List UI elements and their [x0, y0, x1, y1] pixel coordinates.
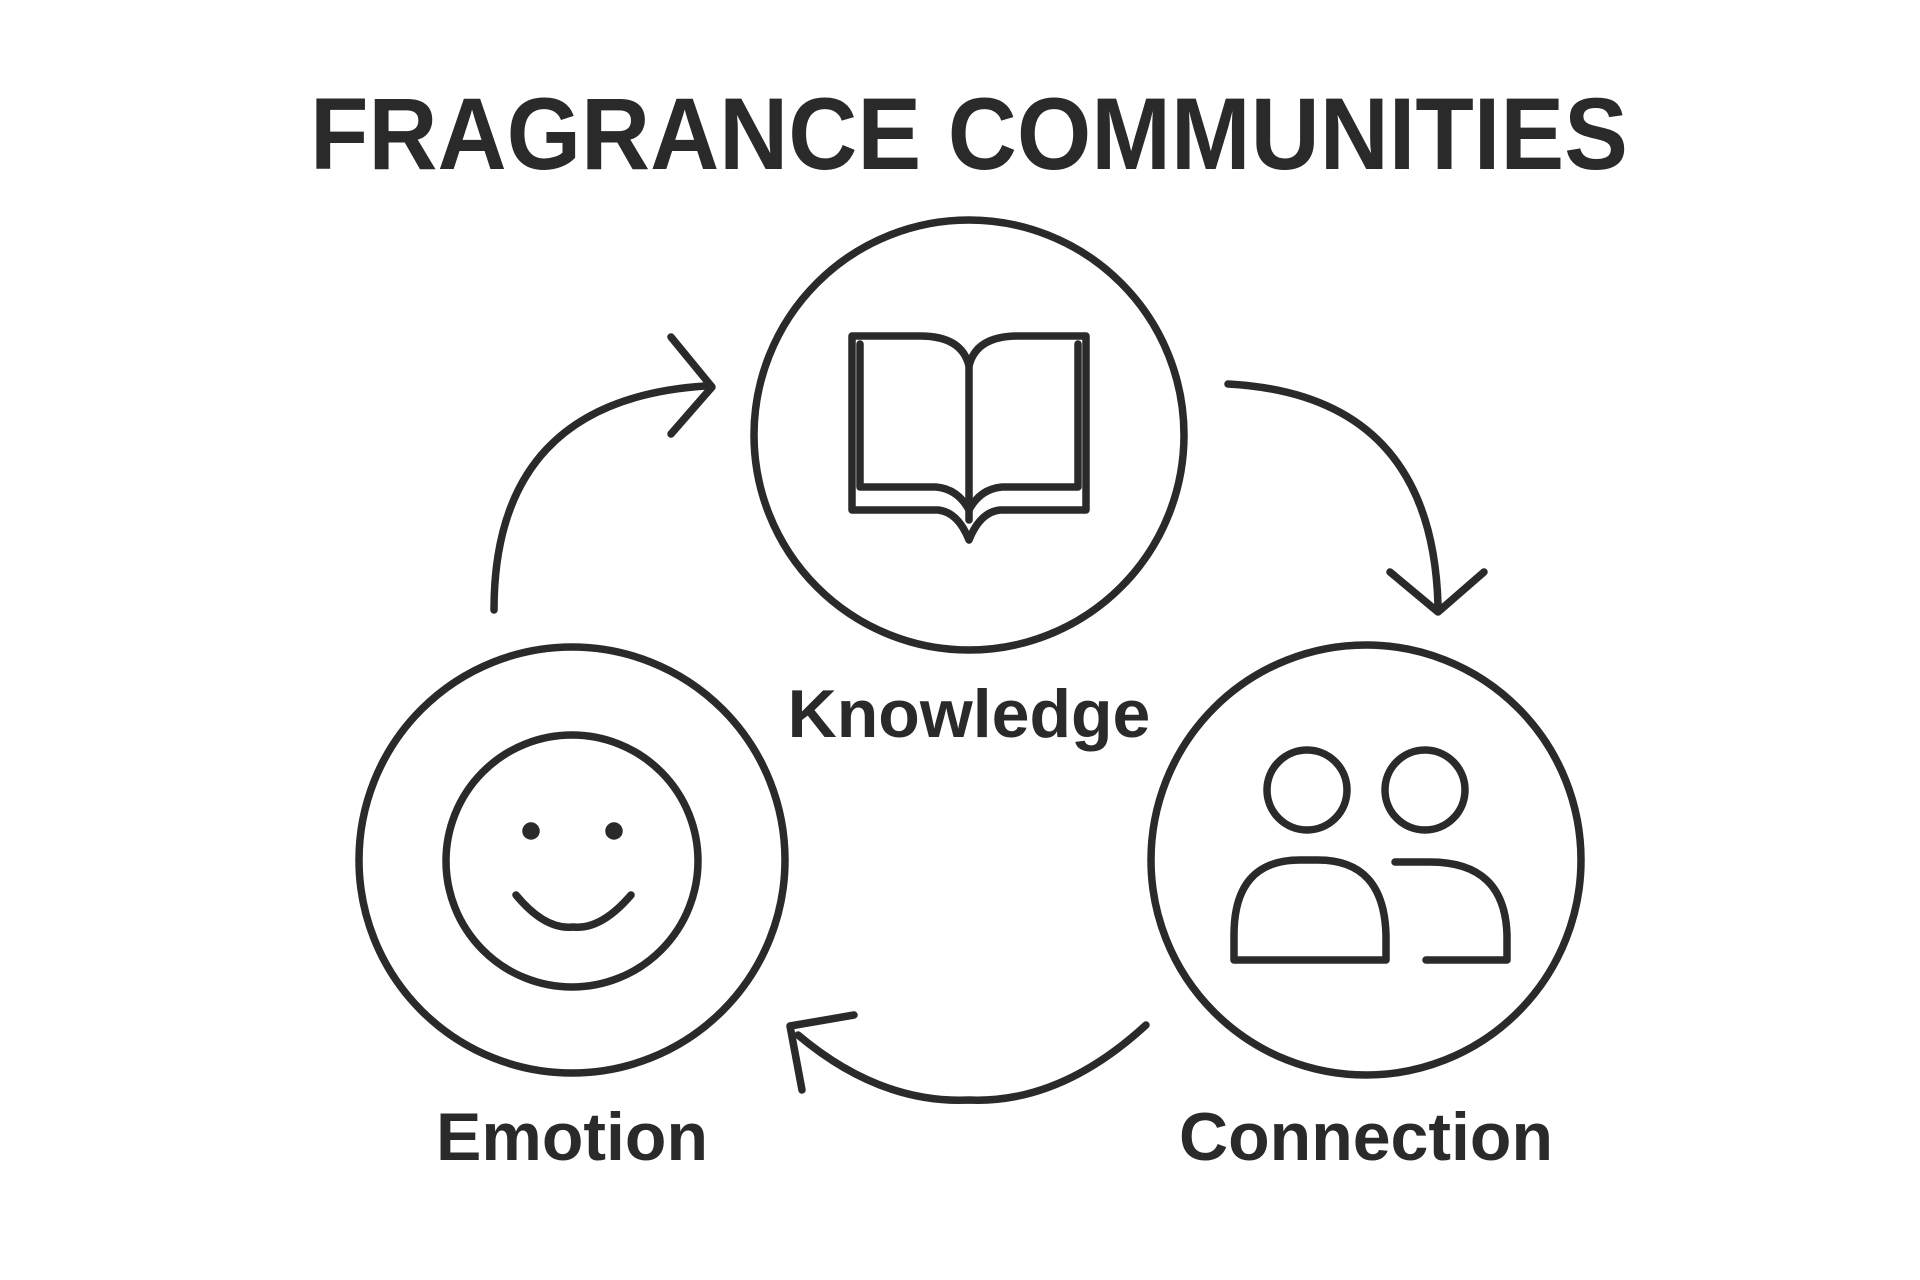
- label: emotion: Emotion: [436, 1099, 708, 1175]
- arrow: connection to emotion: [790, 1015, 1146, 1100]
- node: emotion: [359, 647, 785, 1073]
- icon: book: [852, 336, 1086, 540]
- node: knowledge: [754, 220, 1184, 650]
- arrow: knowledge to connection: [1228, 384, 1484, 612]
- label: knowledge: Knowledge: [788, 676, 1150, 752]
- icon: people: [1234, 750, 1507, 960]
- arrow: emotion to knowledge: [494, 337, 712, 610]
- label: connection: Connection: [1179, 1099, 1553, 1175]
- node: connection: [1151, 645, 1581, 1075]
- title: FRAGRANCE COMMUNITIES: [310, 77, 1628, 191]
- icon: smiley: [446, 735, 698, 987]
